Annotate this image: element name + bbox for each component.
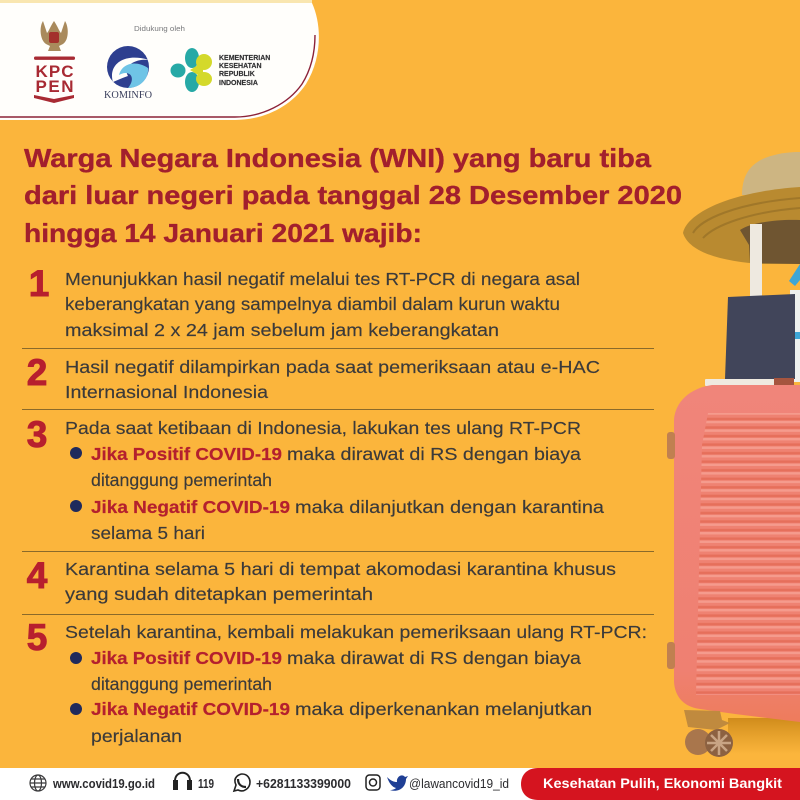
icon: upper latch xyxy=(667,432,675,459)
step 1 xyxy=(29,263,580,340)
icon: floor shadow xyxy=(728,718,800,754)
step 5 bullet negative: maka diperkenankan melanjutkan xyxy=(295,699,592,719)
heading: Warga Negara Indonesia (WNI) yang baru tiba xyxy=(24,143,652,173)
step 3 bullet positive: ditanggung pemerintah xyxy=(91,470,272,490)
logo: KPC PEN: KPC xyxy=(36,62,74,81)
step 5 bullet positive xyxy=(70,648,581,694)
step 2 text: Hasil negatif dilampirkan pada saat pemeriksaan atau e-HAC xyxy=(65,357,600,377)
icon: garuda emblem xyxy=(41,21,68,51)
header panel xyxy=(0,0,319,120)
step 2 text xyxy=(65,357,600,402)
step 1 text: maksimal 2 x 24 jam sebelum jam keberangkatan xyxy=(65,320,499,340)
icon: twitter xyxy=(387,775,408,791)
contact: social handle: @lawancovid19_id xyxy=(409,777,509,791)
icon: rear wheel xyxy=(685,729,711,755)
number 1: 1 xyxy=(29,263,49,304)
step 5 bullet negative xyxy=(70,699,592,746)
step 3 bullet negative: selama 5 hari xyxy=(91,523,205,543)
step 4 text: Karantina selama 5 hari di tempat akomodasi karantina khusus xyxy=(65,559,616,579)
number 2: 2 xyxy=(27,352,47,393)
footer white bar xyxy=(0,768,800,800)
logo: Kementerian Kesehatan: INDONESIA xyxy=(219,80,258,87)
icon: headset xyxy=(174,773,191,789)
icon: suitcase ribs xyxy=(696,413,800,695)
step 3 bullet positive: maka dirawat di RS dengan biaya xyxy=(287,444,581,464)
number 4: 4 xyxy=(27,555,48,596)
logo: Kementerian Kesehatan: REPUBLIK xyxy=(219,71,255,78)
icon: hat underside xyxy=(740,220,800,264)
icon: front wheel xyxy=(705,729,733,757)
icon: hat brim weave xyxy=(693,198,800,238)
logo: Kominfo xyxy=(104,46,152,101)
photo: suitcase with hat and passport xyxy=(667,152,800,757)
number 5: 5 xyxy=(27,617,47,658)
curved maroon line xyxy=(0,35,315,117)
logo: Kementerian Kesehatan: KESEHATAN xyxy=(219,63,262,70)
heading xyxy=(24,143,682,248)
logo: Kominfo: KOMINFO xyxy=(104,89,152,101)
step 3 xyxy=(27,414,604,543)
step 1 text xyxy=(65,269,580,340)
step 5 bullet positive: maka dirawat di RS dengan biaya xyxy=(287,648,581,668)
contact: hotline: 119 xyxy=(198,777,214,791)
slogan pill: Kesehatan Pulih, Ekonomi Bangkit xyxy=(543,775,782,791)
step 2 xyxy=(27,352,600,402)
step 4 text xyxy=(65,559,616,604)
step 2 text: Internasional Indonesia xyxy=(65,382,268,402)
footer xyxy=(0,768,800,800)
step 5 bullet positive: ditanggung pemerintah xyxy=(91,674,272,694)
step 3 bullet positive: Jika Positif COVID-19 xyxy=(91,444,282,464)
step 5 xyxy=(27,617,647,746)
step 5 bullet positive: Jika Positif COVID-19 xyxy=(91,648,282,668)
step 1 text: keberangkatan yang sampelnya diambil dalam kurun waktu xyxy=(65,294,560,314)
contact: whatsapp number: +6281133399000 xyxy=(256,777,351,791)
icon: pole xyxy=(750,215,762,297)
step 1 text: Menunjukkan hasil negatif melalui tes RT-PCR di negara asal xyxy=(65,269,580,289)
caption: didukung oleh: Didukung oleh xyxy=(134,26,185,33)
step 4 xyxy=(27,555,616,604)
heading: hingga 14 Januari 2021 wajib: xyxy=(24,218,422,248)
icon: strap clip xyxy=(774,378,794,387)
step 3 intro: Pada saat ketibaan di Indonesia, lakukan tes ulang RT-PCR xyxy=(65,418,581,438)
icon: blue paper stripe xyxy=(794,332,800,339)
icon: lower latch xyxy=(667,642,675,669)
step 5 bullet negative: Jika Negatif COVID-19 xyxy=(91,699,290,719)
slogan pill xyxy=(521,768,800,800)
icon: globe xyxy=(30,775,46,791)
step 5 bullet negative: perjalanan xyxy=(91,726,182,746)
number 3: 3 xyxy=(27,414,47,455)
panel: white curved header xyxy=(0,3,319,120)
icon: instagram xyxy=(366,775,380,790)
heading: dari luar negeri pada tanggal 28 Desember 2020 xyxy=(24,180,682,210)
step 3 bullet negative: maka dilanjutkan dengan karantina xyxy=(295,497,604,517)
icon: straw hat brim xyxy=(683,187,800,264)
icon: suitcase body xyxy=(674,385,800,722)
step 3 bullet negative xyxy=(70,497,604,543)
icon: whatsapp xyxy=(234,774,250,791)
icon: straw hat crown xyxy=(742,152,800,197)
icon: passport xyxy=(725,294,795,379)
logo: KPC PEN xyxy=(34,56,75,103)
step 5 intro: Setelah karantina, kembali melakukan pemeriksaan ulang RT-PCR: xyxy=(65,622,647,642)
logo: Kementerian Kesehatan: KEMENTERIAN xyxy=(219,55,270,62)
step 4 text: yang sudah ditetapkan pemerintah xyxy=(65,584,373,604)
icon: luggage tag xyxy=(789,264,800,286)
step 3 bullet positive xyxy=(70,444,581,490)
logo: Kementerian Kesehatan xyxy=(170,48,270,92)
icon: paper strip xyxy=(705,379,776,386)
contact: website: www.covid19.go.id xyxy=(52,777,155,791)
step 3 bullet negative: Jika Negatif COVID-19 xyxy=(91,497,290,517)
icon: pole front xyxy=(750,224,762,297)
icon: wheel bracket xyxy=(684,710,730,730)
top cream strip xyxy=(0,0,312,3)
icon: wheel hub xyxy=(707,731,731,755)
logo: KPC PEN: PEN xyxy=(36,77,74,96)
icon: white papers xyxy=(790,290,800,382)
